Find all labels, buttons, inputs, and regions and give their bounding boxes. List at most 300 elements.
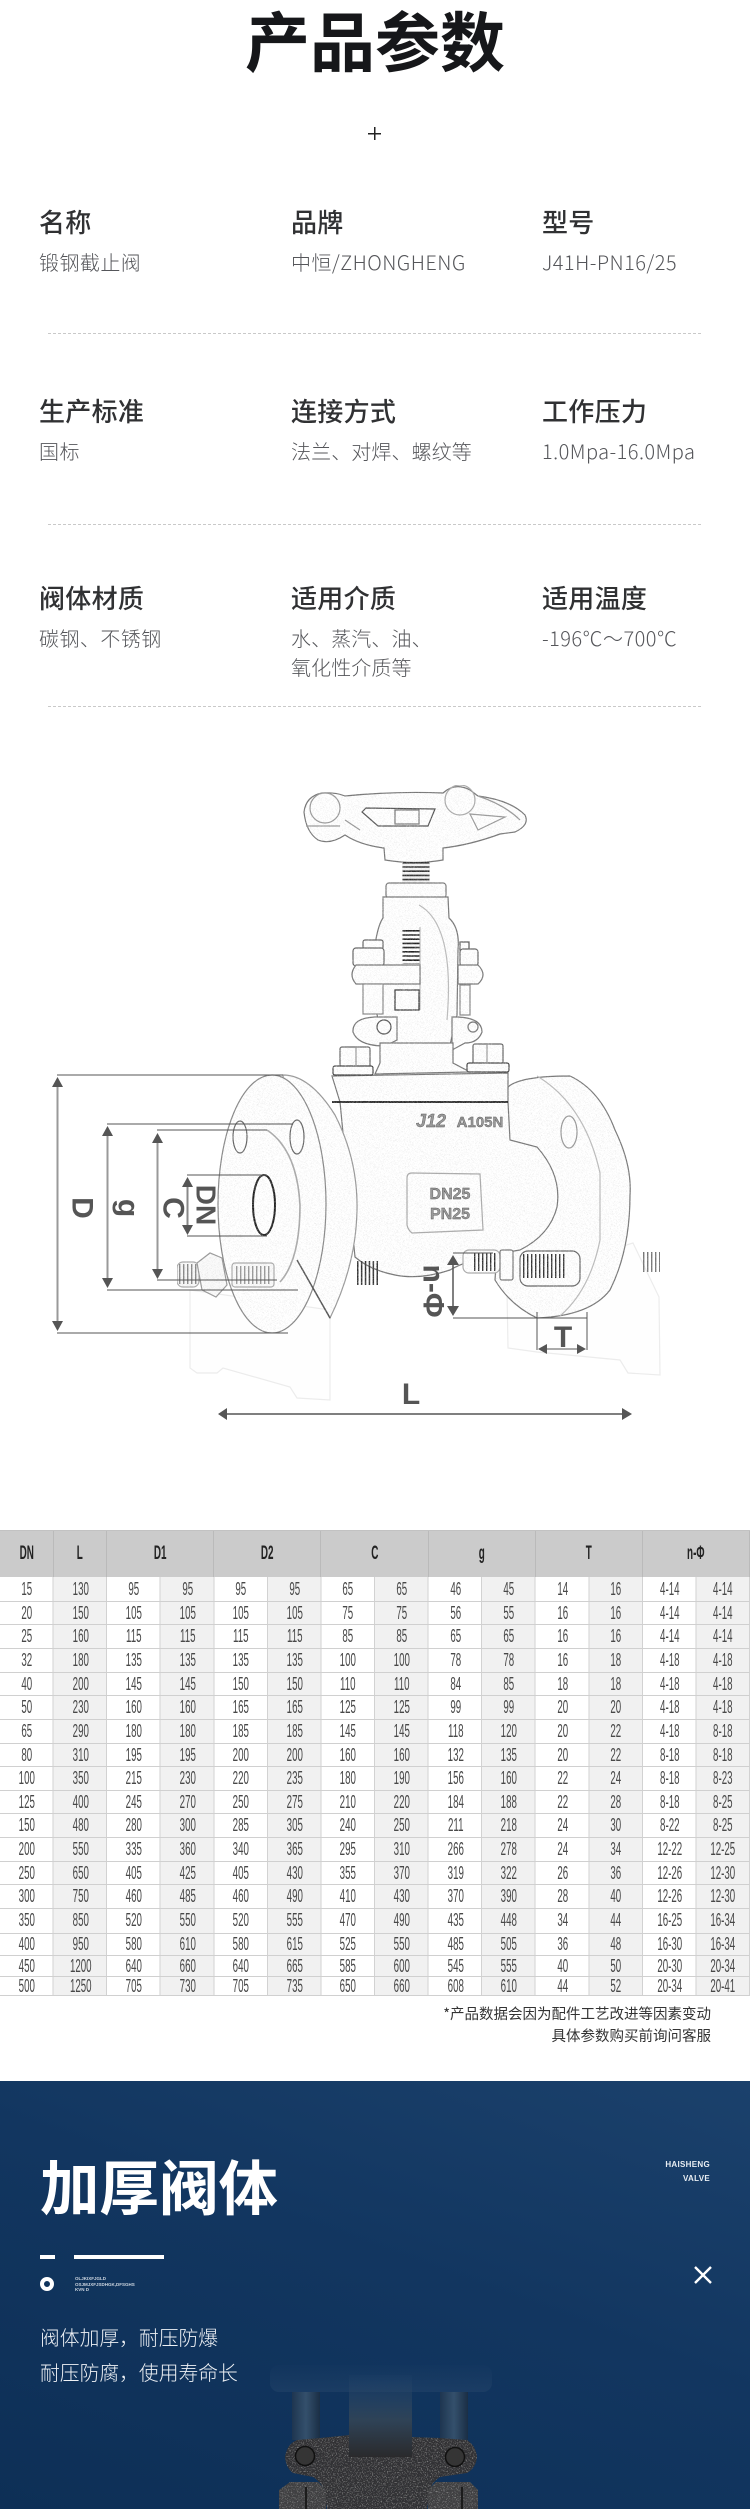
row DN 15: 4-14 — [713, 1579, 733, 1599]
row DN 150: 218 — [501, 1815, 517, 1835]
gland studs — [363, 984, 383, 1014]
row DN 400: 580 — [233, 1934, 249, 1954]
row DN 200: 200 — [19, 1839, 35, 1859]
spec: brand: 品牌 — [291, 203, 344, 240]
micro text: KVN D — [75, 2287, 89, 2292]
row DN 65: 185 — [233, 1721, 249, 1741]
row DN 100: 100 — [19, 1768, 35, 1788]
row DN 500: 52 — [611, 1976, 621, 1996]
table header: L — [77, 1543, 83, 1564]
spec: production standard: 国标 — [39, 436, 80, 465]
row DN 40: 110 — [340, 1674, 356, 1694]
row DN 100: 8-18 — [660, 1768, 679, 1788]
row DN 100: 215 — [126, 1768, 142, 1788]
row DN 300 — [0, 1885, 750, 1909]
row DN 40: 145 — [126, 1674, 142, 1694]
nut left — [279, 2482, 326, 2509]
valve photo crop — [270, 2376, 491, 2509]
row DN 25 — [0, 1625, 750, 1649]
row DN 100: 350 — [72, 1768, 88, 1788]
row DN 125: 125 — [19, 1792, 35, 1812]
row DN 250: 26 — [557, 1863, 568, 1883]
row DN 250: 12-30 — [711, 1863, 736, 1883]
row DN 250: 12-26 — [657, 1863, 682, 1883]
row DN 80: 8-18 — [713, 1745, 733, 1765]
row DN 150: 24 — [557, 1815, 568, 1835]
dimension: n-phi: n-Φ — [416, 1265, 450, 1317]
row DN 125: 270 — [179, 1792, 196, 1812]
row DN 20: 105 — [233, 1603, 249, 1623]
row DN 80: 310 — [72, 1745, 88, 1765]
row DN 300: 12-26 — [657, 1886, 682, 1906]
valve stands (faint) — [190, 1243, 660, 1400]
row DN 40: 40 — [21, 1674, 32, 1694]
body — [332, 1073, 558, 1277]
row DN 25: 115 — [180, 1626, 195, 1646]
row DN 50: 99 — [503, 1697, 514, 1717]
casting marks: DN25 — [430, 1186, 471, 1203]
yoke — [375, 897, 458, 1045]
row DN 100: 230 — [179, 1768, 196, 1788]
row DN 25: 85 — [343, 1626, 354, 1646]
row DN 400: 16-34 — [711, 1934, 736, 1954]
row DN 50 — [0, 1696, 750, 1720]
row DN 150: 480 — [72, 1815, 88, 1835]
dimension: C — [152, 1130, 277, 1280]
row DN 65: 290 — [72, 1721, 88, 1741]
row DN 500: 650 — [340, 1976, 356, 1996]
row DN 40: 145 — [179, 1674, 196, 1694]
heading: 加厚阀体 — [40, 2142, 278, 2228]
row DN 20: 150 — [72, 1603, 88, 1623]
spec: name: 名称 — [39, 203, 92, 240]
row DN 150: 300 — [179, 1815, 196, 1835]
row DN 500: 730 — [179, 1976, 196, 1996]
row DN 300: 40 — [611, 1886, 621, 1906]
row DN 20: 105 — [286, 1603, 303, 1623]
row DN 250: 319 — [447, 1863, 463, 1883]
row DN 15: 130 — [72, 1579, 88, 1599]
handle fade — [270, 2365, 492, 2392]
spec: working pressure: 1.0Mpa-16.0Mpa — [542, 436, 695, 465]
row DN 250 — [0, 1862, 750, 1885]
row DN 80: 195 — [179, 1745, 196, 1765]
row DN 350: 490 — [394, 1910, 410, 1930]
row DN 250: 430 — [286, 1863, 303, 1883]
row DN 25: 160 — [72, 1626, 88, 1646]
table header: DN — [19, 1543, 33, 1564]
spec: applicable temperature — [542, 579, 677, 652]
dimension: g — [102, 1124, 298, 1290]
dimension: D — [52, 1075, 288, 1333]
row DN 15: 14 — [557, 1579, 568, 1599]
row DN 300: 750 — [72, 1886, 88, 1906]
row DN 300: 28 — [557, 1886, 568, 1906]
row DN 32: 180 — [72, 1650, 88, 1670]
row DN 32: 100 — [340, 1650, 356, 1670]
row DN 65: 180 — [179, 1721, 196, 1741]
spec: working pressure: 工作压力 — [542, 392, 647, 429]
spec: connection: 法兰、对焊、螺纹等 — [291, 436, 472, 465]
row DN 40: 4-18 — [713, 1674, 733, 1694]
flange bore — [253, 1175, 275, 1235]
row DN 125 — [0, 1791, 750, 1814]
row DN 15: 95 — [182, 1579, 193, 1599]
row DN 250: 36 — [611, 1863, 621, 1883]
row DN 125: 184 — [447, 1792, 463, 1812]
row DN 25: 115 — [233, 1626, 249, 1646]
stem threads — [402, 862, 430, 884]
row DN 80: 8-18 — [660, 1745, 679, 1765]
row DN 32: 4-18 — [713, 1650, 733, 1670]
brand tag: HAISHENG — [665, 2160, 710, 2169]
row DN 32: 32 — [21, 1650, 32, 1670]
divider bars — [40, 2255, 164, 2259]
row DN 200: 278 — [501, 1839, 517, 1859]
row DN 32: 135 — [126, 1650, 142, 1670]
row DN 80: 80 — [21, 1745, 32, 1765]
micro text — [75, 2276, 135, 2292]
spec: brand — [291, 203, 466, 276]
row DN 450: 665 — [286, 1956, 303, 1976]
row DN 80: 135 — [501, 1745, 517, 1765]
row DN 450: 660 — [179, 1956, 196, 1976]
spec: model — [542, 203, 677, 276]
row DN 100: 190 — [394, 1768, 410, 1788]
left stud — [292, 2392, 320, 2440]
row DN 400: 525 — [340, 1934, 356, 1954]
row DN 15: 46 — [450, 1579, 461, 1599]
row DN 80: 200 — [233, 1745, 249, 1765]
spec: name — [39, 203, 141, 276]
row DN 50: 4-18 — [660, 1697, 679, 1717]
row DN 50: 20 — [611, 1697, 621, 1717]
spec: body material — [39, 579, 162, 652]
table header: D1 — [154, 1543, 166, 1564]
row DN 450: 640 — [126, 1956, 142, 1976]
yoke lobes — [353, 1017, 397, 1046]
row DN 20: 55 — [503, 1603, 514, 1623]
bolt cap right — [446, 2448, 464, 2466]
row DN 65: 8-18 — [713, 1721, 733, 1741]
dimension: C: C — [156, 1197, 190, 1219]
row DN 100: 156 — [447, 1768, 463, 1788]
top collar — [386, 883, 446, 898]
row DN 15: 15 — [21, 1579, 32, 1599]
parameter table — [0, 1530, 750, 1996]
row DN 125: 245 — [126, 1792, 142, 1812]
row DN 400: 16-30 — [657, 1934, 682, 1954]
row DN 50: 160 — [179, 1697, 196, 1717]
row DN 500: 705 — [126, 1976, 142, 1996]
row DN 20: 20 — [21, 1603, 32, 1623]
row DN 50: 4-18 — [713, 1697, 733, 1717]
row DN 20: 4-14 — [713, 1603, 733, 1623]
row DN 300: 370 — [447, 1886, 463, 1906]
row DN 450: 585 — [340, 1956, 356, 1976]
row DN 200: 365 — [286, 1839, 303, 1859]
row DN 32: 4-18 — [660, 1650, 679, 1670]
row DN 400: 580 — [126, 1934, 142, 1954]
spec: applicable media: 水、蒸汽、油、 — [291, 623, 432, 652]
row DN 300: 12-30 — [711, 1886, 736, 1906]
row DN 50: 165 — [286, 1697, 303, 1717]
dimension: n-phi — [416, 1253, 587, 1318]
row DN 80: 160 — [394, 1745, 410, 1765]
row DN 80: 132 — [447, 1745, 463, 1765]
dimension: DN — [182, 1175, 267, 1236]
left flange face — [218, 1075, 326, 1333]
row DN 100 — [0, 1767, 750, 1791]
row DN 300: 410 — [340, 1886, 356, 1906]
row DN 350: 16-34 — [711, 1910, 736, 1930]
row DN 250: 425 — [179, 1863, 196, 1883]
table header — [0, 1530, 750, 1577]
row DN 80: 22 — [611, 1745, 621, 1765]
neck — [375, 1043, 470, 1074]
row DN 50: 165 — [233, 1697, 249, 1717]
plus mark — [368, 127, 381, 140]
row DN 200: 266 — [447, 1839, 463, 1859]
bonnet bolts — [340, 1047, 370, 1067]
row DN 150: 150 — [19, 1815, 35, 1835]
row DN 40: 150 — [286, 1674, 303, 1694]
spec: production standard — [39, 392, 144, 465]
row DN 20: 105 — [179, 1603, 196, 1623]
row DN 25: 25 — [21, 1626, 32, 1646]
row DN 500: 500 — [19, 1976, 35, 1996]
dimension: T: T — [554, 1321, 572, 1354]
row DN 200: 295 — [340, 1839, 356, 1859]
dimension: g: g — [112, 1199, 144, 1217]
spec: applicable media: 适用介质 — [291, 579, 396, 616]
valve body sketch — [177, 785, 660, 1333]
row DN 50: 20 — [557, 1697, 568, 1717]
casting marks: A105N — [457, 1114, 503, 1131]
row DN 350: 448 — [501, 1910, 517, 1930]
row DN 15 — [0, 1578, 750, 1602]
row DN 20: 4-14 — [660, 1603, 679, 1623]
row DN 50: 230 — [72, 1697, 88, 1717]
row DN 80: 195 — [126, 1745, 142, 1765]
micro text: OSJMJXFJSDHGK,DFSGHS — [75, 2282, 135, 2287]
dimension: DN: DN — [190, 1185, 222, 1225]
row DN 100: 22 — [557, 1768, 568, 1788]
row DN 450: 450 — [19, 1956, 35, 1976]
table header: C — [371, 1543, 378, 1564]
spec: brand: 中恒/ZHONGHENG — [291, 247, 466, 276]
row DN 150: 250 — [394, 1815, 410, 1835]
row DN 400: 950 — [72, 1934, 88, 1954]
row DN 350: 555 — [286, 1910, 303, 1930]
row DN 50: 125 — [340, 1697, 356, 1717]
row DN 65: 20 — [557, 1721, 568, 1741]
row DN 450: 40 — [557, 1956, 568, 1976]
row DN 65: 4-18 — [660, 1721, 679, 1741]
row DN 150: 305 — [286, 1815, 303, 1835]
row DN 20: 105 — [126, 1603, 142, 1623]
row DN 400: 485 — [447, 1934, 463, 1954]
row DN 25: 85 — [396, 1626, 407, 1646]
row DN 300: 460 — [233, 1886, 249, 1906]
row DN 32: 16 — [557, 1650, 568, 1670]
description: 耐压防腐，使用寿命长 — [40, 2357, 238, 2386]
row DN 450: 545 — [447, 1956, 463, 1976]
row DN 65: 145 — [394, 1721, 410, 1741]
row DN 125: 188 — [501, 1792, 517, 1812]
row DN 450: 50 — [611, 1956, 621, 1976]
row DN 200: 550 — [72, 1839, 88, 1859]
row DN 15: 16 — [611, 1579, 621, 1599]
row DN 100: 235 — [286, 1768, 303, 1788]
bolt cap left — [296, 2446, 314, 2466]
brand tag: VALVE — [683, 2174, 710, 2183]
center stem fade — [349, 2375, 412, 2457]
row DN 150: 280 — [126, 1815, 142, 1835]
row DN 450 — [0, 1956, 750, 1977]
row DN 450: 20-30 — [657, 1956, 682, 1976]
dimension: T — [537, 1312, 587, 1354]
row DN 350: 520 — [233, 1910, 249, 1930]
row DN 200: 24 — [557, 1839, 568, 1859]
row DN 40: 200 — [72, 1674, 88, 1694]
table column stripes — [0, 1577, 750, 1996]
row DN 15: 45 — [503, 1579, 514, 1599]
row DN 150: 30 — [611, 1815, 621, 1835]
row DN 300: 485 — [179, 1886, 196, 1906]
row DN 125: 28 — [611, 1792, 621, 1812]
right flange bolts — [463, 1250, 500, 1273]
row DN 65: 180 — [126, 1721, 142, 1741]
row DN 15: 4-14 — [660, 1579, 679, 1599]
row DN 65: 120 — [501, 1721, 517, 1741]
footnote — [443, 2003, 711, 2046]
spec: connection — [291, 392, 472, 465]
row DN 32 — [0, 1649, 750, 1673]
row DN 200: 360 — [179, 1839, 196, 1859]
row DN 500: 610 — [501, 1976, 517, 1996]
row DN 350: 16-25 — [657, 1910, 682, 1930]
row DN 80: 160 — [340, 1745, 356, 1765]
row DN 25: 115 — [287, 1626, 302, 1646]
row DN 15: 95 — [128, 1579, 139, 1599]
row DN 350: 520 — [126, 1910, 142, 1930]
row DN 150: 8-22 — [660, 1815, 679, 1835]
row DN 40: 18 — [557, 1674, 568, 1694]
wheel — [304, 785, 526, 862]
spec: applicable temperature: -196℃～700℃ — [542, 623, 677, 652]
brand tag — [665, 2160, 710, 2183]
row DN 20: 75 — [396, 1603, 407, 1623]
row DN 450: 20-34 — [711, 1956, 736, 1976]
left flange back rim — [283, 1075, 357, 1318]
row DN 15: 95 — [289, 1579, 300, 1599]
row DN 350: 44 — [611, 1910, 621, 1930]
casting marks: J12 — [416, 1111, 446, 1131]
row DN 450: 1200 — [70, 1956, 91, 1976]
row DN 100: 8-23 — [713, 1768, 733, 1788]
row DN 350: 34 — [557, 1910, 568, 1930]
casting marks: PN25 — [430, 1206, 470, 1223]
spec: applicable media: 氧化性介质等 — [291, 652, 412, 681]
panel: thickened valve body — [0, 2081, 750, 2509]
row DN 20: 16 — [611, 1603, 621, 1623]
row DN 125: 22 — [557, 1792, 568, 1812]
row DN 125: 400 — [72, 1792, 88, 1812]
row DN 250: 322 — [501, 1863, 517, 1883]
row DN 15: 95 — [236, 1579, 246, 1599]
right flange — [495, 1076, 630, 1318]
row DN 100: 24 — [611, 1768, 621, 1788]
row DN 500 — [0, 1977, 750, 1996]
row DN 250: 650 — [72, 1863, 88, 1883]
row DN 125: 8-25 — [713, 1792, 733, 1812]
table header: T — [586, 1543, 592, 1564]
row DN 350 — [0, 1909, 750, 1934]
table header: n-Φ — [687, 1543, 705, 1564]
row DN 200: 34 — [611, 1839, 621, 1859]
valve dimension diagram — [52, 785, 660, 1420]
row DN 20: 75 — [343, 1603, 354, 1623]
row DN 300: 300 — [19, 1886, 35, 1906]
table header: D2 — [261, 1543, 274, 1564]
row DN 32: 78 — [503, 1650, 514, 1670]
row DN 150: 240 — [340, 1815, 356, 1835]
row DN 150: 285 — [233, 1815, 249, 1835]
row DN 15: 65 — [343, 1579, 354, 1599]
row DN 400: 505 — [501, 1934, 517, 1954]
row DN 500: 44 — [557, 1976, 568, 1996]
row DN 20 — [0, 1602, 750, 1625]
row DN 80 — [0, 1744, 750, 1767]
left flange bolts — [177, 1262, 199, 1287]
footnote: 具体参数购买前询问客服 — [552, 2025, 711, 2046]
row DN 40: 85 — [503, 1674, 514, 1694]
row DN 25: 4-14 — [660, 1626, 679, 1646]
dimension: L — [218, 1378, 632, 1420]
row DN 32: 135 — [233, 1650, 249, 1670]
row DN 500: 660 — [394, 1976, 410, 1996]
row DN 150: 8-25 — [713, 1815, 733, 1835]
row DN 65: 185 — [286, 1721, 303, 1741]
row DN 200: 12-22 — [657, 1839, 682, 1859]
yoke threads — [402, 930, 420, 964]
row DN 300: 430 — [394, 1886, 410, 1906]
row DN 350: 470 — [340, 1910, 356, 1930]
row DN 150: 211 — [448, 1815, 463, 1835]
row DN 80: 200 — [286, 1745, 303, 1765]
row DN 400: 400 — [19, 1934, 35, 1954]
row DN 50: 99 — [450, 1697, 461, 1717]
spec: applicable media — [291, 579, 432, 681]
spec: model: J41H-PN16/25 — [542, 247, 677, 276]
row DN 25: 65 — [450, 1626, 461, 1646]
row DN 400: 610 — [179, 1934, 196, 1954]
row DN 25: 4-14 — [713, 1626, 733, 1646]
row DN 125: 220 — [394, 1792, 410, 1812]
row DN 50: 50 — [21, 1697, 32, 1717]
row DN 500: 608 — [447, 1976, 463, 1996]
spec: applicable temperature: 适用温度 — [542, 579, 647, 616]
row DN 40: 150 — [233, 1674, 249, 1694]
row DN 125: 275 — [286, 1792, 303, 1812]
row DN 40: 84 — [450, 1674, 461, 1694]
row DN 150 — [0, 1814, 750, 1838]
row DN 400: 36 — [557, 1934, 568, 1954]
spec: name: 锻钢截止阀 — [39, 247, 141, 276]
row DN 200: 335 — [126, 1839, 142, 1859]
footnote: *产品数据会因为配件工艺改进等因素变动 — [443, 2003, 711, 2024]
